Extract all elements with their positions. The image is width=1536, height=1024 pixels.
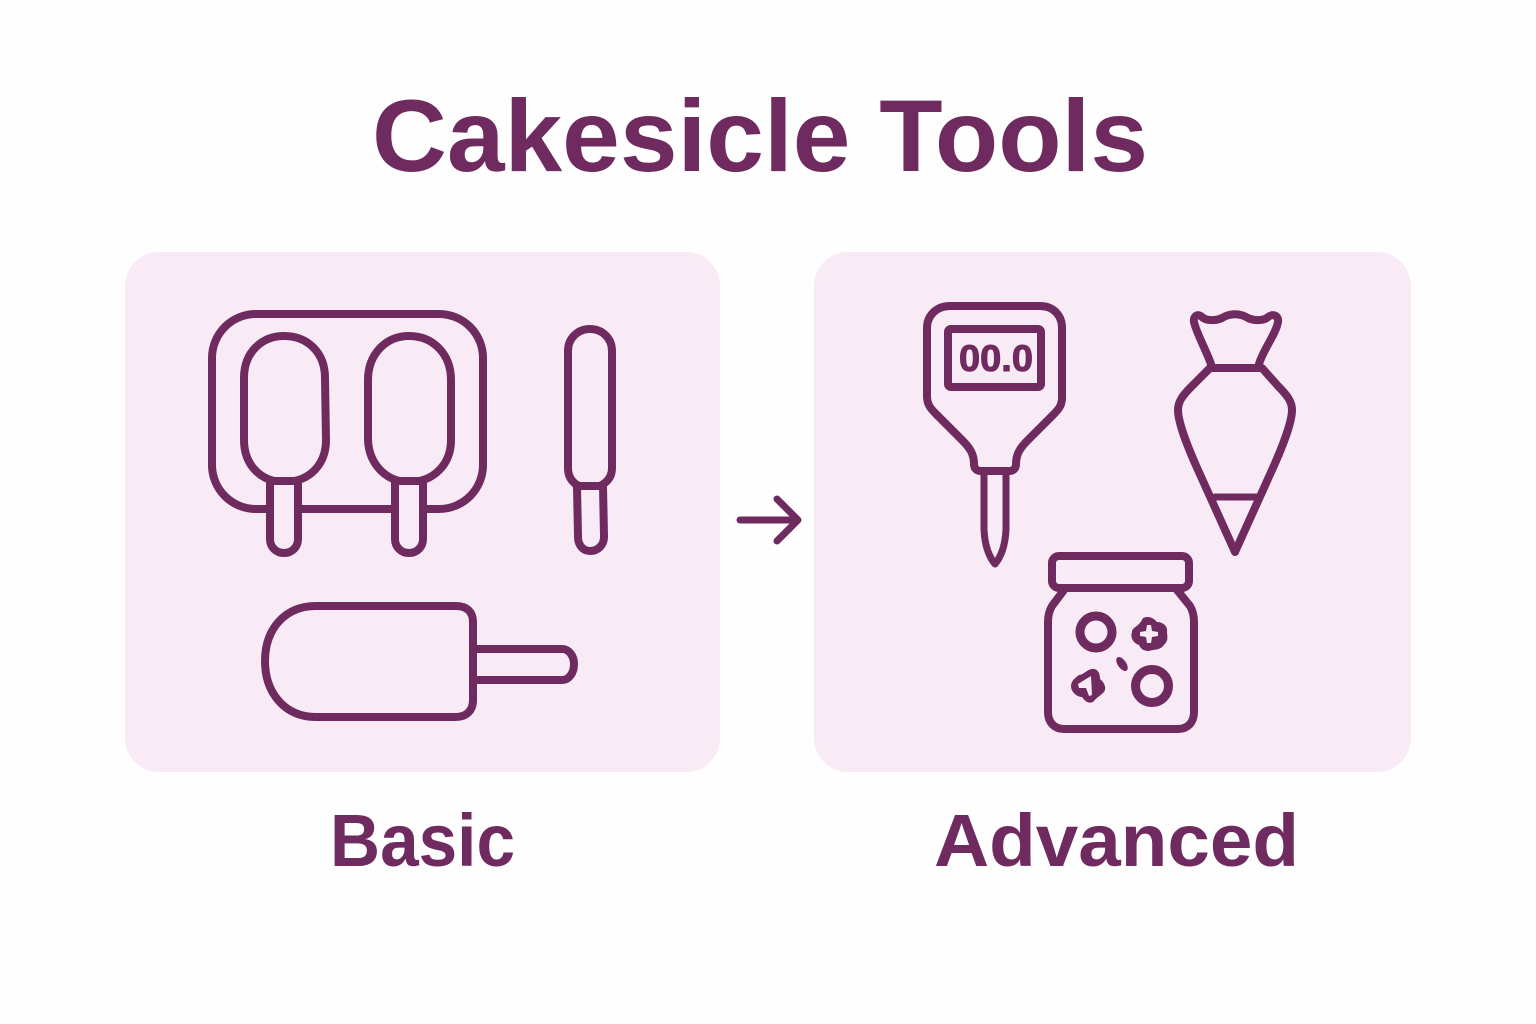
icon: single slim cakesicle [568,329,612,551]
icon: horizontal cakesicle [265,606,574,717]
icon: digital thermometer [927,306,1062,564]
sprinkle [1131,617,1167,651]
sprinkle [1071,669,1105,703]
icon: sprinkles jar [1048,556,1194,729]
icon: piping bag [1178,314,1292,552]
icon: two-cavity cakesicle mold [212,314,483,553]
title: Cakesicle Tools [372,79,1148,193]
thermometer readout: 00.0 [959,338,1033,379]
label: advanced: Advanced [934,799,1299,882]
panel: basic [125,252,720,772]
arrow [740,499,798,541]
panel: advanced [814,252,1411,772]
seed sprinkle [1114,655,1130,673]
label: basic: Basic [330,799,515,882]
